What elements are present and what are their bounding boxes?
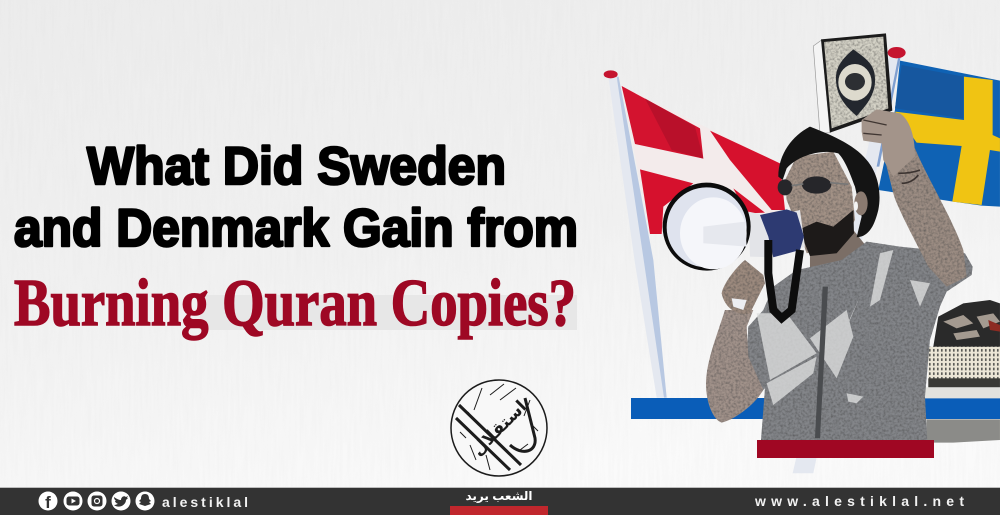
red tab <box>450 506 548 515</box>
handle: alestiklal <box>162 494 248 510</box>
head <box>785 152 855 253</box>
social icons <box>38 492 154 512</box>
man <box>654 109 973 440</box>
icon: youtube <box>64 492 82 510</box>
sunglasses <box>778 176 848 195</box>
neck <box>810 230 867 270</box>
calligraphy text: استقلال <box>468 397 530 459</box>
megaphone horn <box>654 174 759 279</box>
website: www.alestiklal.net <box>754 493 964 509</box>
megaphone hand <box>722 260 765 314</box>
Swedish flag <box>878 61 1000 207</box>
Swedish flagpole <box>793 47 906 473</box>
left forearm <box>706 310 763 423</box>
logo <box>451 380 547 476</box>
shirt highlights <box>757 250 930 405</box>
hair <box>778 127 880 237</box>
beard <box>802 210 854 256</box>
title line 2: and Denmark Gain from <box>14 199 578 258</box>
Danish flagpole <box>604 70 667 398</box>
icon: facebook: f <box>45 493 51 512</box>
megaphone body <box>748 209 805 257</box>
Danish flag <box>622 86 786 234</box>
footer bar <box>0 487 1000 515</box>
shirt placket <box>815 287 828 438</box>
megaphone strap <box>768 240 800 318</box>
photo collage <box>604 33 1000 473</box>
title line 3: Burning Quran Copies? <box>14 266 576 340</box>
title <box>14 137 578 340</box>
Arabic slogan: الشعب يريد <box>465 489 533 503</box>
calligraphy strokes <box>456 384 538 470</box>
icon: snapchat <box>136 492 154 510</box>
shirt <box>747 242 973 440</box>
raised arm <box>883 148 967 287</box>
icon: twitter <box>112 492 130 510</box>
title line 1: What Did Sweden <box>87 137 506 196</box>
red bar <box>757 440 934 458</box>
title highlight band <box>200 295 577 330</box>
city skyline <box>925 300 1000 443</box>
blue bar <box>631 398 1000 419</box>
ear <box>854 191 868 215</box>
Quran book <box>813 33 892 133</box>
raised hand <box>862 109 915 177</box>
icon: instagram <box>88 492 106 510</box>
